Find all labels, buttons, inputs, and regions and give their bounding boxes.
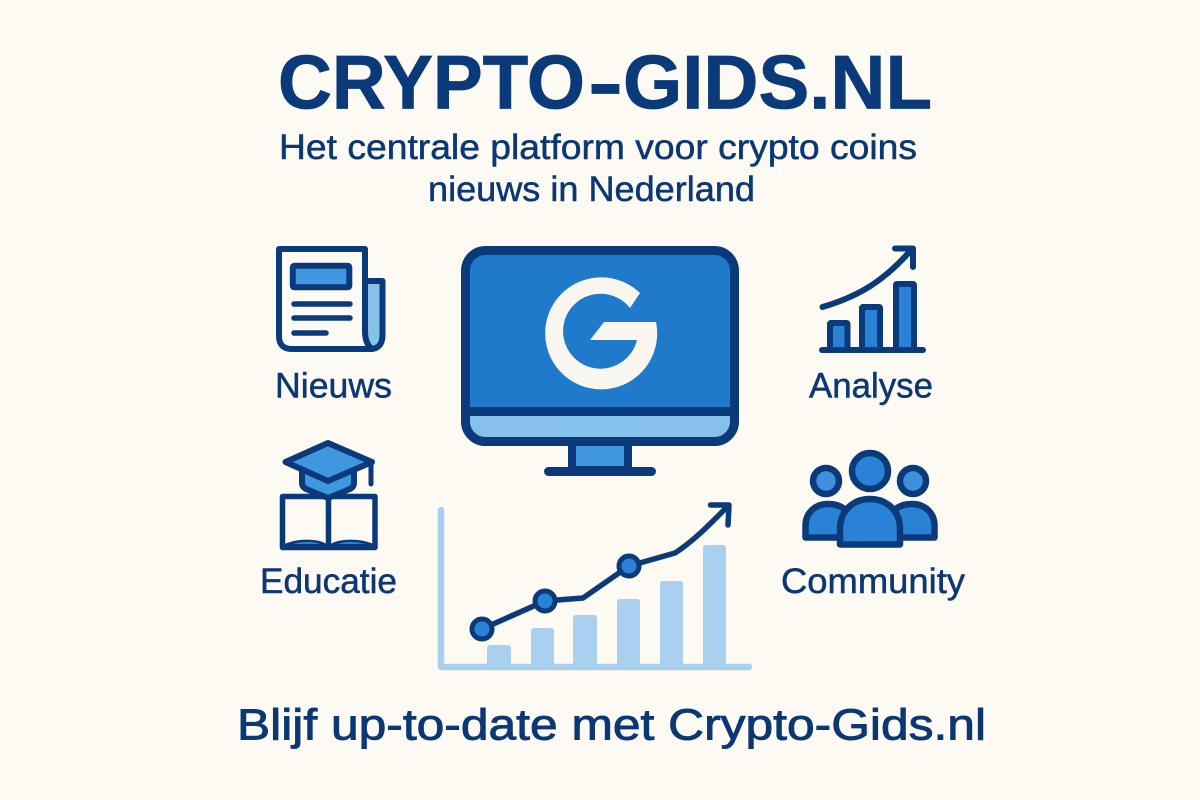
monitor screen bbox=[466, 250, 734, 442]
subtitle: Het centrale platform voor crypto coins bbox=[279, 128, 917, 167]
monitor with G logo bbox=[466, 250, 734, 472]
subtitle bbox=[279, 128, 917, 209]
title: CRYPTO bbox=[278, 40, 585, 126]
icon: analysis bar chart with arrow bbox=[822, 248, 923, 350]
trend markers bbox=[472, 556, 639, 639]
label: Community: Community bbox=[781, 562, 966, 601]
icon: community people bbox=[806, 453, 934, 544]
chart bars bbox=[487, 545, 726, 667]
chart axes bbox=[441, 510, 749, 667]
icon: newspaper bbox=[279, 249, 382, 349]
label: Analyse: Analyse bbox=[809, 366, 933, 406]
monitor stand bbox=[548, 442, 652, 472]
trend line with arrow bbox=[482, 505, 729, 629]
footer tagline: Blijf up-to-date met Crypto-Gids.nl bbox=[237, 700, 986, 750]
title bbox=[278, 40, 932, 126]
G logo bbox=[545, 277, 657, 389]
title: - bbox=[588, 40, 623, 126]
title: GIDS.NL bbox=[623, 40, 932, 126]
label: Nieuws: Nieuws bbox=[275, 366, 392, 406]
subtitle: nieuws in Nederland bbox=[428, 170, 755, 209]
label: Educatie: Educatie bbox=[260, 562, 397, 601]
growth chart bbox=[441, 505, 749, 667]
icon: graduation cap and book bbox=[282, 443, 375, 548]
